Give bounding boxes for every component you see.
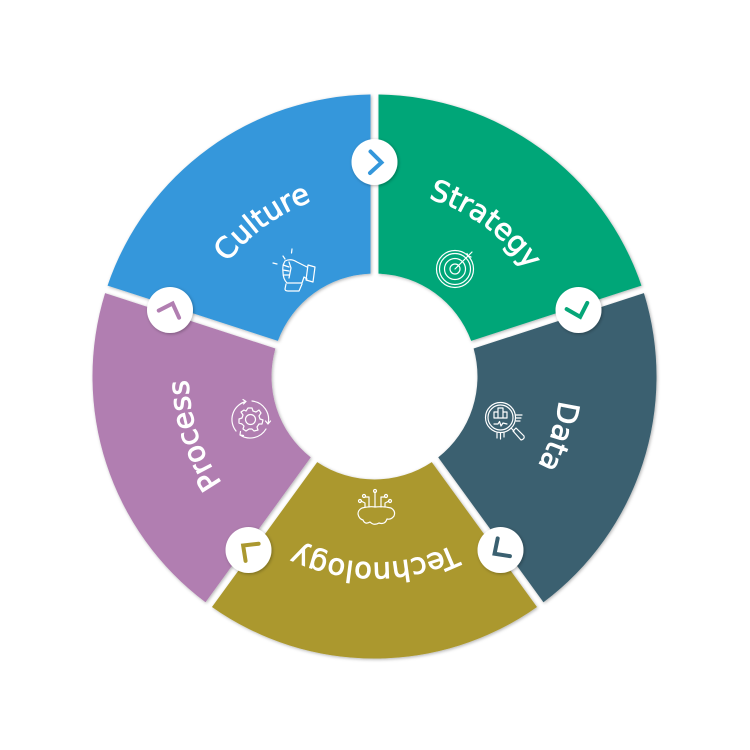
center circle (276, 278, 472, 474)
panel: culture (108, 94, 374, 343)
panel: data (438, 293, 660, 604)
badge: strategy to data (556, 287, 602, 333)
segment: process (92, 293, 311, 602)
badge: culture to strategy (352, 139, 398, 185)
segment: culture (108, 95, 371, 341)
segment: data (438, 293, 657, 602)
label: Culture: Culture (216, 188, 310, 258)
badge: technology to process (226, 527, 272, 573)
badge: data to technology (478, 527, 524, 573)
label: Process: Process (172, 381, 221, 493)
badge: process to culture (147, 287, 193, 333)
label: Technology: Technology (290, 544, 462, 584)
panel: strategy (378, 94, 644, 343)
label: Data: Data (538, 402, 580, 469)
icon: target (436, 250, 474, 288)
panel: process (92, 293, 313, 604)
icon: magnifier with chart (486, 402, 524, 440)
segment: strategy (378, 95, 641, 341)
icon: cloud circuit (358, 490, 395, 524)
icon: fist bump (273, 249, 315, 291)
panel: technology (212, 462, 539, 662)
label: Strategy: Strategy (430, 180, 540, 266)
segment: technology (212, 462, 537, 659)
icon: gear with cycle arrows (232, 400, 270, 438)
